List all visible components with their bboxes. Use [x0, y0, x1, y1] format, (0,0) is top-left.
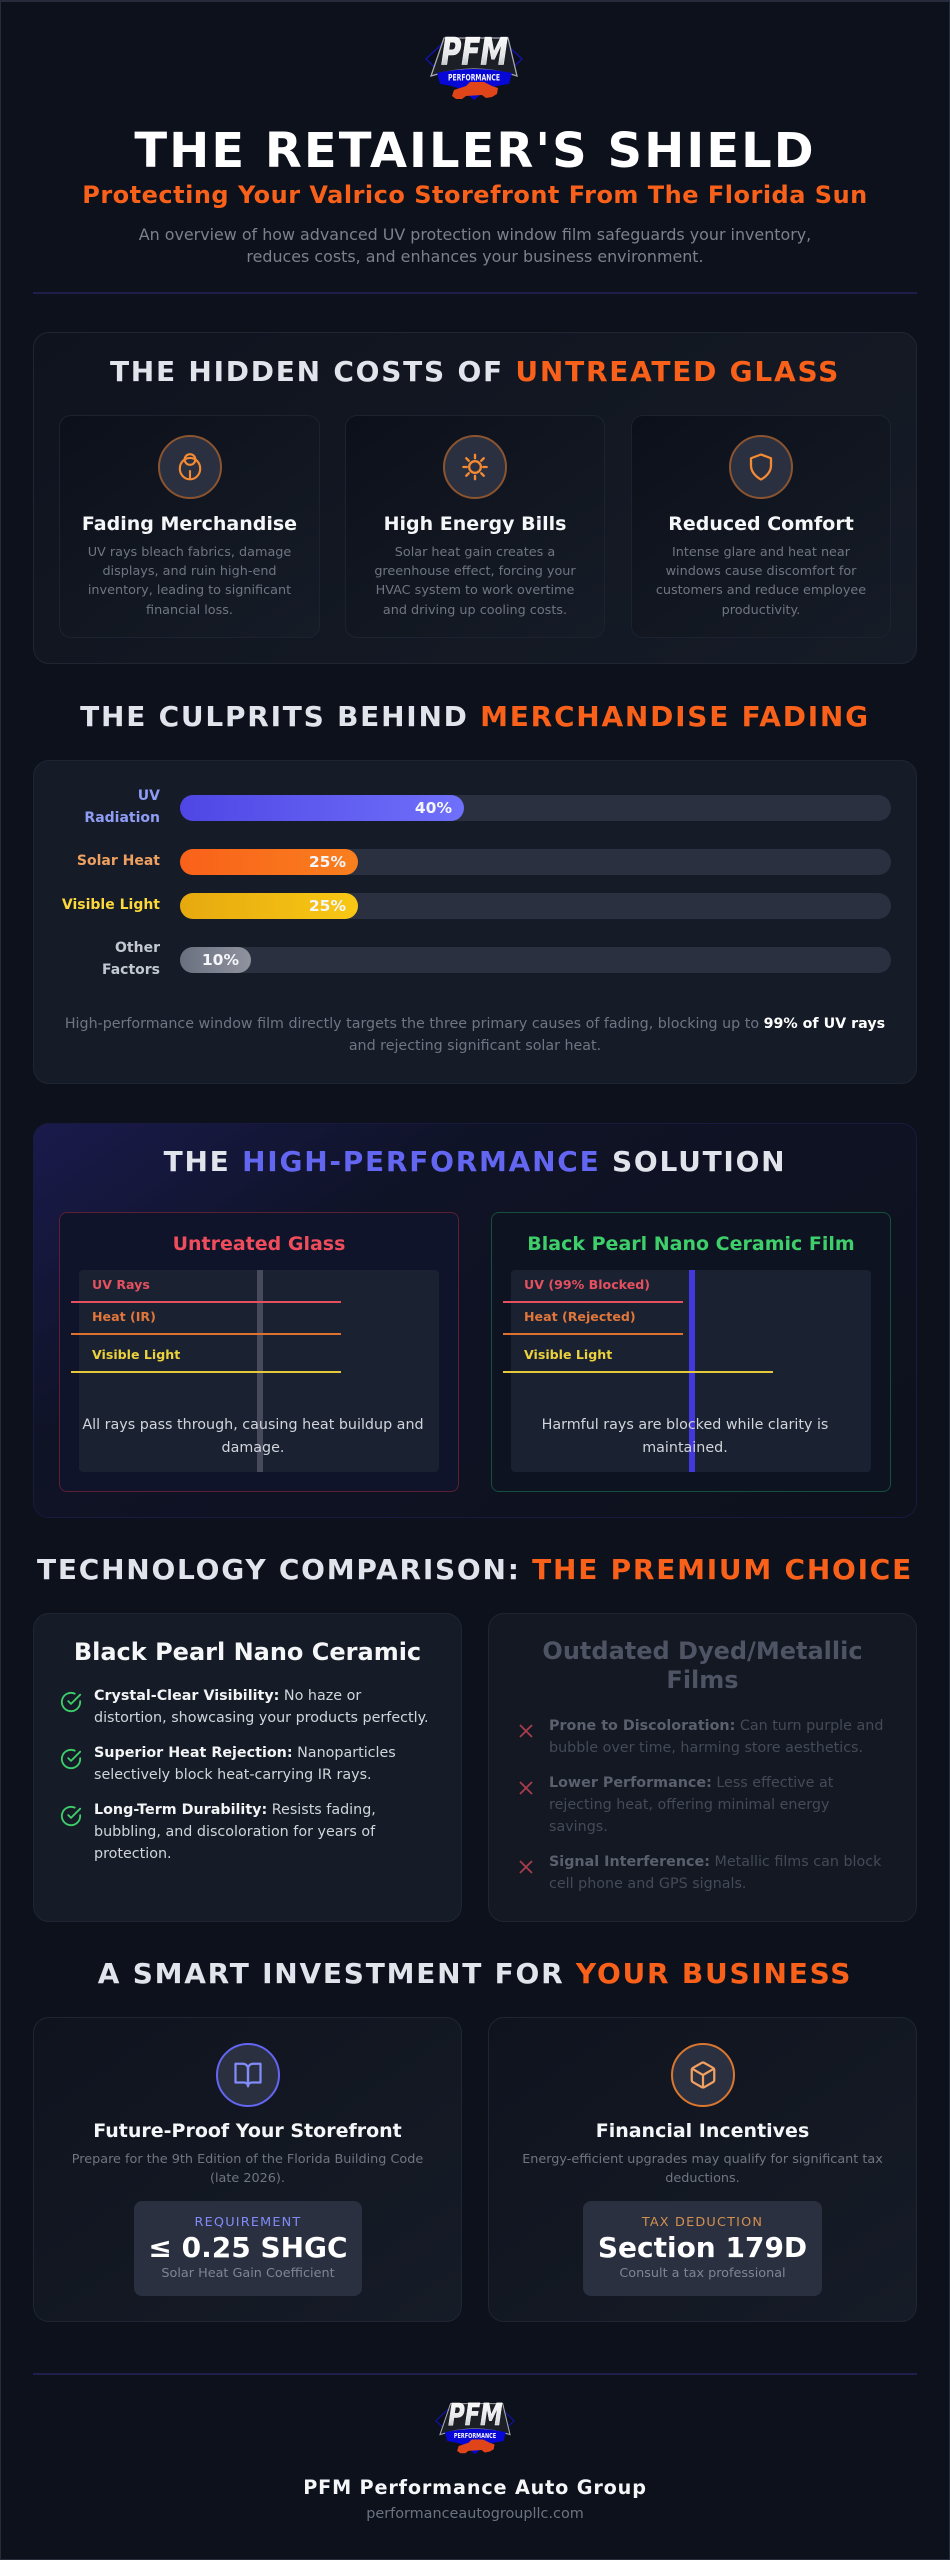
chart note: and rejecting significant solar heat.	[349, 1038, 601, 1054]
label: UV radiation: UV	[138, 788, 160, 804]
card text: Energy-efficient upgrades may qualify for significant tax	[522, 2152, 883, 2167]
diagram box	[511, 1270, 871, 1472]
intro text	[139, 225, 811, 266]
bar: solar 25%: 25%	[309, 853, 346, 871]
label: UV blocked: UV (99% Blocked)	[524, 1277, 650, 1292]
stat note: Consult a tax professional	[619, 2266, 786, 2281]
card text	[656, 545, 866, 618]
icon: check 1	[60, 1692, 82, 1712]
intro text: reduces costs, and enhances your business environment.	[246, 247, 704, 266]
heading: investment: A SMART INVESTMENT FOR YOUR BUSINESS	[98, 1957, 852, 1990]
item 2: Lower Performance: Less effective at	[549, 1775, 833, 1791]
ray: heat rejected	[503, 1333, 683, 1335]
diagram box	[79, 1270, 439, 1472]
caption	[82, 1417, 424, 1456]
stat box: requirement	[134, 2201, 362, 2296]
icon: fading	[158, 435, 222, 499]
panel title: Films	[666, 1666, 739, 1694]
item 3: bubbling, and discoloration for years of	[94, 1824, 375, 1840]
caption: All rays pass through, causing heat buildup and	[82, 1417, 424, 1433]
bar: UV 40%: 40%	[415, 799, 452, 817]
film pane	[689, 1270, 695, 1472]
item 1: distortion, showcasing your products perfectly.	[94, 1710, 429, 1726]
card title: Financial Incentives	[596, 2120, 809, 2142]
label: UV radiation: Radiation	[84, 810, 160, 826]
caption: damage.	[222, 1440, 284, 1456]
stat box: tax deduction	[583, 2201, 822, 2296]
stat label: TAX DEDUCTION	[642, 2215, 763, 2230]
item 1	[94, 1688, 429, 1726]
icon: book	[216, 2043, 280, 2107]
card title: Reduced Comfort	[668, 513, 854, 535]
footer company name: PFM Performance Auto Group	[303, 2476, 647, 2499]
card title: Future-Proof Your Storefront	[93, 2120, 402, 2142]
item 2: Superior Heat Rejection: Nanoparticles	[94, 1745, 396, 1761]
label: UV radiation	[84, 788, 160, 826]
item 2	[549, 1775, 833, 1835]
bar: UV 40%	[180, 795, 891, 821]
card text: displays, and ruin high-end	[102, 564, 277, 579]
caption: Harmful rays are blocked while clarity is	[542, 1417, 828, 1433]
ray: UV blocked	[503, 1301, 683, 1303]
chart note: High-performance window film directly targets the three primary causes of fading, blocking up to 99% of UV rays	[65, 1016, 885, 1032]
card text: greenhouse effect, forcing your	[374, 564, 576, 579]
card text	[88, 545, 291, 618]
panel: hidden costs	[33, 332, 917, 664]
panel: future-proof	[33, 2017, 462, 2322]
header divider	[33, 292, 917, 294]
stat note: Solar Heat Gain Coefficient	[161, 2266, 335, 2281]
card text: UV rays bleach fabrics, damage	[88, 545, 291, 560]
label: other factors	[102, 940, 160, 978]
stat label: REQUIREMENT	[195, 2215, 301, 2230]
stat value: ≤ 0.25 SHGC	[148, 2231, 348, 2264]
panel: solution	[33, 1123, 917, 1518]
panel title	[542, 1637, 863, 1694]
ray: visible	[503, 1371, 773, 1373]
logo: PFM Performance: PERFORMANCE	[448, 74, 500, 84]
bar: other 10%	[180, 947, 891, 973]
item 1: bubble over time, harming store aesthetics.	[549, 1740, 863, 1756]
item 3	[549, 1854, 882, 1892]
card text: inventory, leading to significant	[88, 583, 291, 598]
ray: UV	[71, 1301, 341, 1303]
icon: check 2	[60, 1748, 82, 1770]
panel: black pearl	[33, 1613, 462, 1922]
icon: shield	[729, 435, 793, 499]
panel title: Black Pearl Nano Ceramic	[74, 1638, 421, 1666]
bar: visible 25%	[180, 893, 891, 919]
footer logo	[435, 2402, 515, 2454]
item 2: selectively block heat-carrying IR rays.	[94, 1767, 372, 1783]
item 1	[549, 1718, 883, 1756]
panel title: Outdated Dyed/Metallic	[542, 1637, 863, 1665]
item 2	[94, 1745, 396, 1783]
card text: HVAC system to work overtime	[376, 583, 574, 598]
item 2: rejecting heat, offering minimal energy	[549, 1797, 829, 1813]
ray: visible	[71, 1371, 341, 1373]
card text: (late 2026).	[210, 2171, 285, 2186]
card text: customers and reduce employee	[656, 583, 866, 598]
card text: deductions.	[665, 2171, 740, 2186]
label: heat rejected: Heat (Rejected)	[524, 1309, 636, 1324]
panel: ceramic film	[491, 1212, 891, 1492]
icon: cross 2	[519, 1781, 533, 1795]
stat value: Section 179D	[598, 2231, 807, 2264]
heading: hidden costs: THE HIDDEN COSTS OF UNTREATED GLASS	[110, 355, 840, 388]
subtitle: Protecting Your Valrico Storefront From The Florida Sun	[82, 181, 868, 209]
title: Black Pearl Nano Ceramic Film	[527, 1233, 855, 1255]
panel: bar chart	[33, 760, 917, 1084]
item 3: Long-Term Durability: Resists fading,	[94, 1802, 376, 1818]
card text	[522, 2152, 883, 2186]
icon: cross 1	[519, 1724, 533, 1738]
footer logo: PERFORMANCE	[454, 2431, 496, 2440]
bar: other 10%: 10%	[202, 951, 239, 969]
item 2: savings.	[549, 1819, 608, 1835]
panel: untreated glass	[59, 1212, 459, 1492]
card text: Solar heat gain creates a	[395, 545, 555, 560]
logo: PFM Performance	[425, 36, 523, 100]
card: reduced comfort	[631, 415, 891, 638]
card text: Prepare for the 9th Edition of the Florida Building Code	[72, 2152, 423, 2167]
heading: comparison: TECHNOLOGY COMPARISON: THE PREMIUM CHOICE	[37, 1553, 913, 1586]
glass pane	[257, 1270, 263, 1472]
icon: check 3	[60, 1806, 82, 1826]
label: other factors: Factors	[102, 962, 160, 978]
card text: financial loss.	[146, 603, 233, 618]
card title: High Energy Bills	[384, 513, 566, 535]
label: other factors: Other	[115, 940, 160, 956]
icon: cross 3	[519, 1860, 533, 1874]
item 3: cell phone and GPS signals.	[549, 1876, 746, 1892]
item 3: protection.	[94, 1846, 172, 1862]
chart note	[65, 1016, 885, 1054]
card: energy bills	[345, 415, 605, 638]
footer url: performanceautogroupllc.com	[366, 2506, 584, 2522]
footer divider	[33, 2373, 917, 2375]
heading: culprits: THE CULPRITS BEHIND MERCHANDISE FADING	[80, 700, 870, 733]
card text	[374, 545, 576, 618]
item 3	[94, 1802, 376, 1862]
heading: solution: THE HIGH-PERFORMANCE SOLUTION	[164, 1145, 786, 1178]
label: visible light: Visible Light	[62, 897, 160, 913]
label: heat: Heat (IR)	[92, 1309, 156, 1324]
icon: box	[671, 2043, 735, 2107]
bar: visible 25%: 25%	[309, 897, 346, 915]
label: visible: Visible Light	[92, 1347, 180, 1362]
label: solar heat: Solar Heat	[77, 853, 160, 869]
item 3: Signal Interference: Metallic films can block	[549, 1854, 881, 1870]
bar: solar 25%	[180, 849, 891, 875]
label: UV rays: UV Rays	[92, 1277, 150, 1292]
card text: windows cause discomfort for	[666, 564, 856, 579]
card text	[72, 2152, 423, 2186]
card text: productivity.	[722, 603, 800, 618]
caption: maintained.	[642, 1440, 728, 1456]
panel: financial incentives	[488, 2017, 917, 2322]
ray: heat	[71, 1333, 341, 1335]
card text: and driving up cooling costs.	[383, 603, 567, 618]
card: fading merchandise	[59, 415, 320, 638]
panel: outdated films	[488, 1613, 917, 1922]
title: THE RETAILER'S SHIELD	[134, 123, 816, 179]
item 1: Prone to Discoloration: Can turn purple and	[549, 1718, 883, 1734]
caption	[542, 1417, 828, 1456]
intro text: An overview of how advanced UV protection window film safeguards your inventory,	[139, 225, 811, 244]
card title: Fading Merchandise	[82, 513, 297, 535]
label: visible: Visible Light	[524, 1347, 612, 1362]
item 1: Crystal-Clear Visibility: No haze or	[94, 1688, 361, 1704]
title: Untreated Glass	[173, 1233, 345, 1255]
icon: sun	[443, 435, 507, 499]
card text: Intense glare and heat near	[672, 545, 850, 560]
